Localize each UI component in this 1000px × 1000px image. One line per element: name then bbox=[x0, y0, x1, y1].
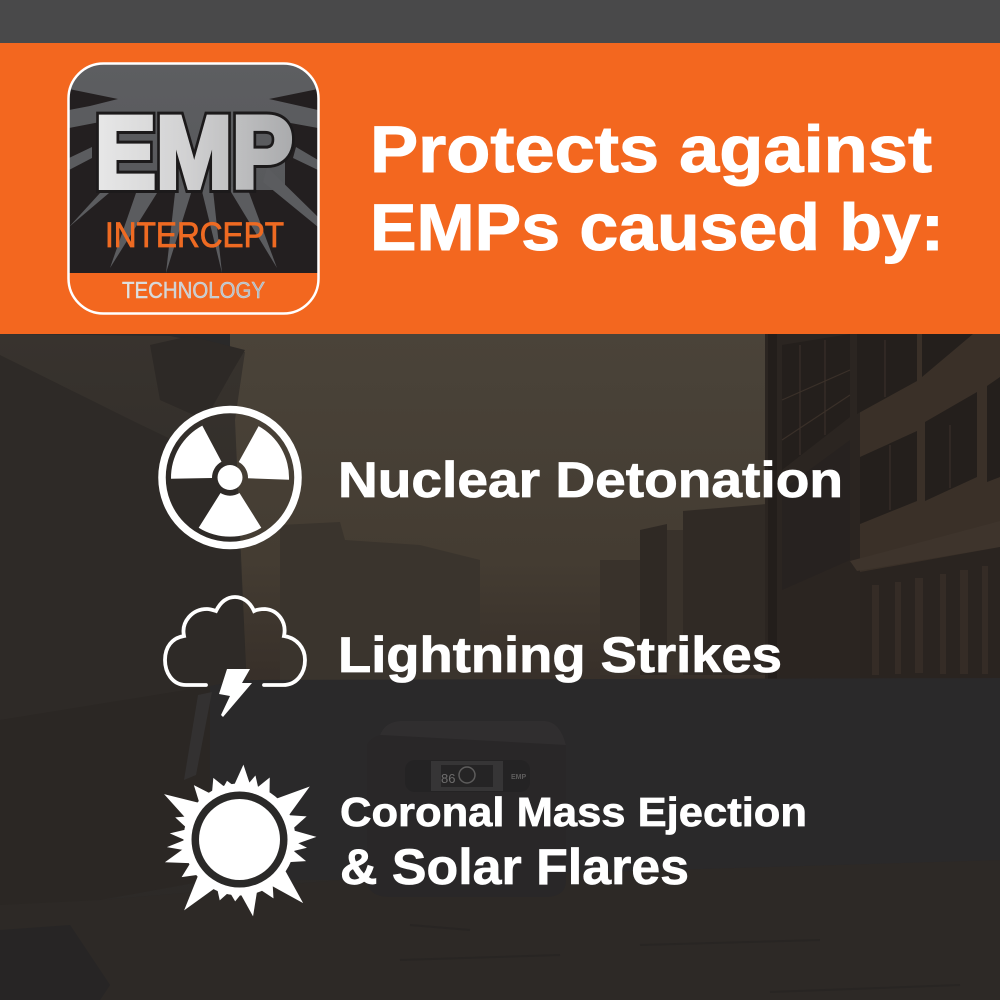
icon: radiation symbol bbox=[162, 410, 298, 546]
badge: EMP Intercept Technology bbox=[68, 64, 318, 314]
icon: storm cloud with lightning bolt bbox=[165, 597, 305, 717]
INTERCEPT label: INTERCEPT bbox=[105, 216, 284, 255]
ghost: camera-side device outline bbox=[184, 692, 212, 780]
label: coronal mass ejection and solar flares bbox=[340, 789, 807, 895]
heading: Protects against bbox=[370, 112, 932, 186]
ghost: power station product: EMP bbox=[511, 774, 526, 781]
label: coronal mass ejection and solar flares: & Solar Flares bbox=[340, 839, 689, 895]
EMP letters: EMP bbox=[95, 96, 293, 210]
orange header band bbox=[0, 43, 1000, 334]
heading bbox=[370, 112, 944, 264]
EMP letters: EMP bbox=[95, 96, 293, 210]
heading: EMPs caused by: bbox=[370, 190, 944, 264]
TECHNOLOGY label: TECHNOLOGY bbox=[122, 277, 265, 303]
background: ruined city scene bbox=[0, 334, 1000, 1000]
ghost: power station product: 86 bbox=[441, 771, 455, 786]
label: nuclear detonation: Nuclear Detonation bbox=[338, 452, 843, 508]
ghost: power station product bbox=[367, 721, 566, 897]
top strip bbox=[0, 0, 1000, 43]
label: lightning strikes: Lightning Strikes bbox=[338, 627, 782, 683]
icon: sun with corona bbox=[158, 764, 317, 918]
label: coronal mass ejection and solar flares: Coronal Mass Ejection bbox=[340, 789, 807, 835]
